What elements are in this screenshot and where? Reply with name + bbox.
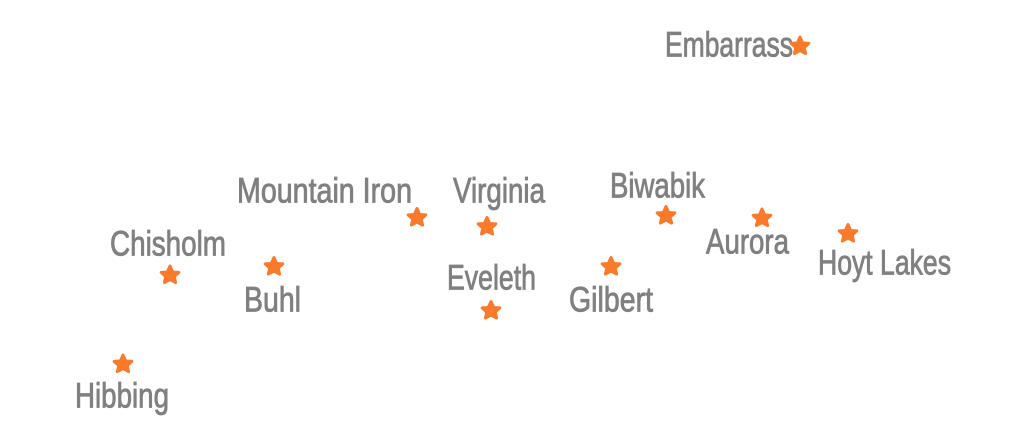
label: Aurora: Aurora: [706, 222, 789, 262]
label: Embarrass: Embarrass: [665, 26, 793, 64]
label: Mountain Iron: Mountain Iron: [237, 172, 412, 210]
star: Eveleth: [482, 302, 500, 318]
label: Hoyt Lakes: Hoyt Lakes: [818, 244, 951, 282]
star: Aurora: [753, 209, 771, 226]
star: Buhl: [265, 258, 283, 274]
star: Hoyt Lakes: [839, 224, 857, 241]
label: Virginia: Virginia: [453, 172, 545, 210]
star: Biwabik: [657, 206, 675, 223]
label: Gilbert: Gilbert: [569, 280, 653, 320]
label: Eveleth: Eveleth: [447, 258, 536, 298]
star: Chisholm: [161, 266, 179, 283]
star: Virginia: [478, 218, 496, 234]
label: Hibbing: Hibbing: [75, 376, 169, 416]
star: Embarrass: [791, 37, 809, 54]
star: Hibbing: [114, 355, 132, 372]
star: Gilbert: [602, 258, 620, 274]
label: Biwabik: Biwabik: [610, 166, 705, 206]
label: Chisholm: Chisholm: [110, 224, 226, 264]
label: Buhl: Buhl: [244, 280, 301, 320]
star: Mountain Iron: [408, 208, 426, 225]
